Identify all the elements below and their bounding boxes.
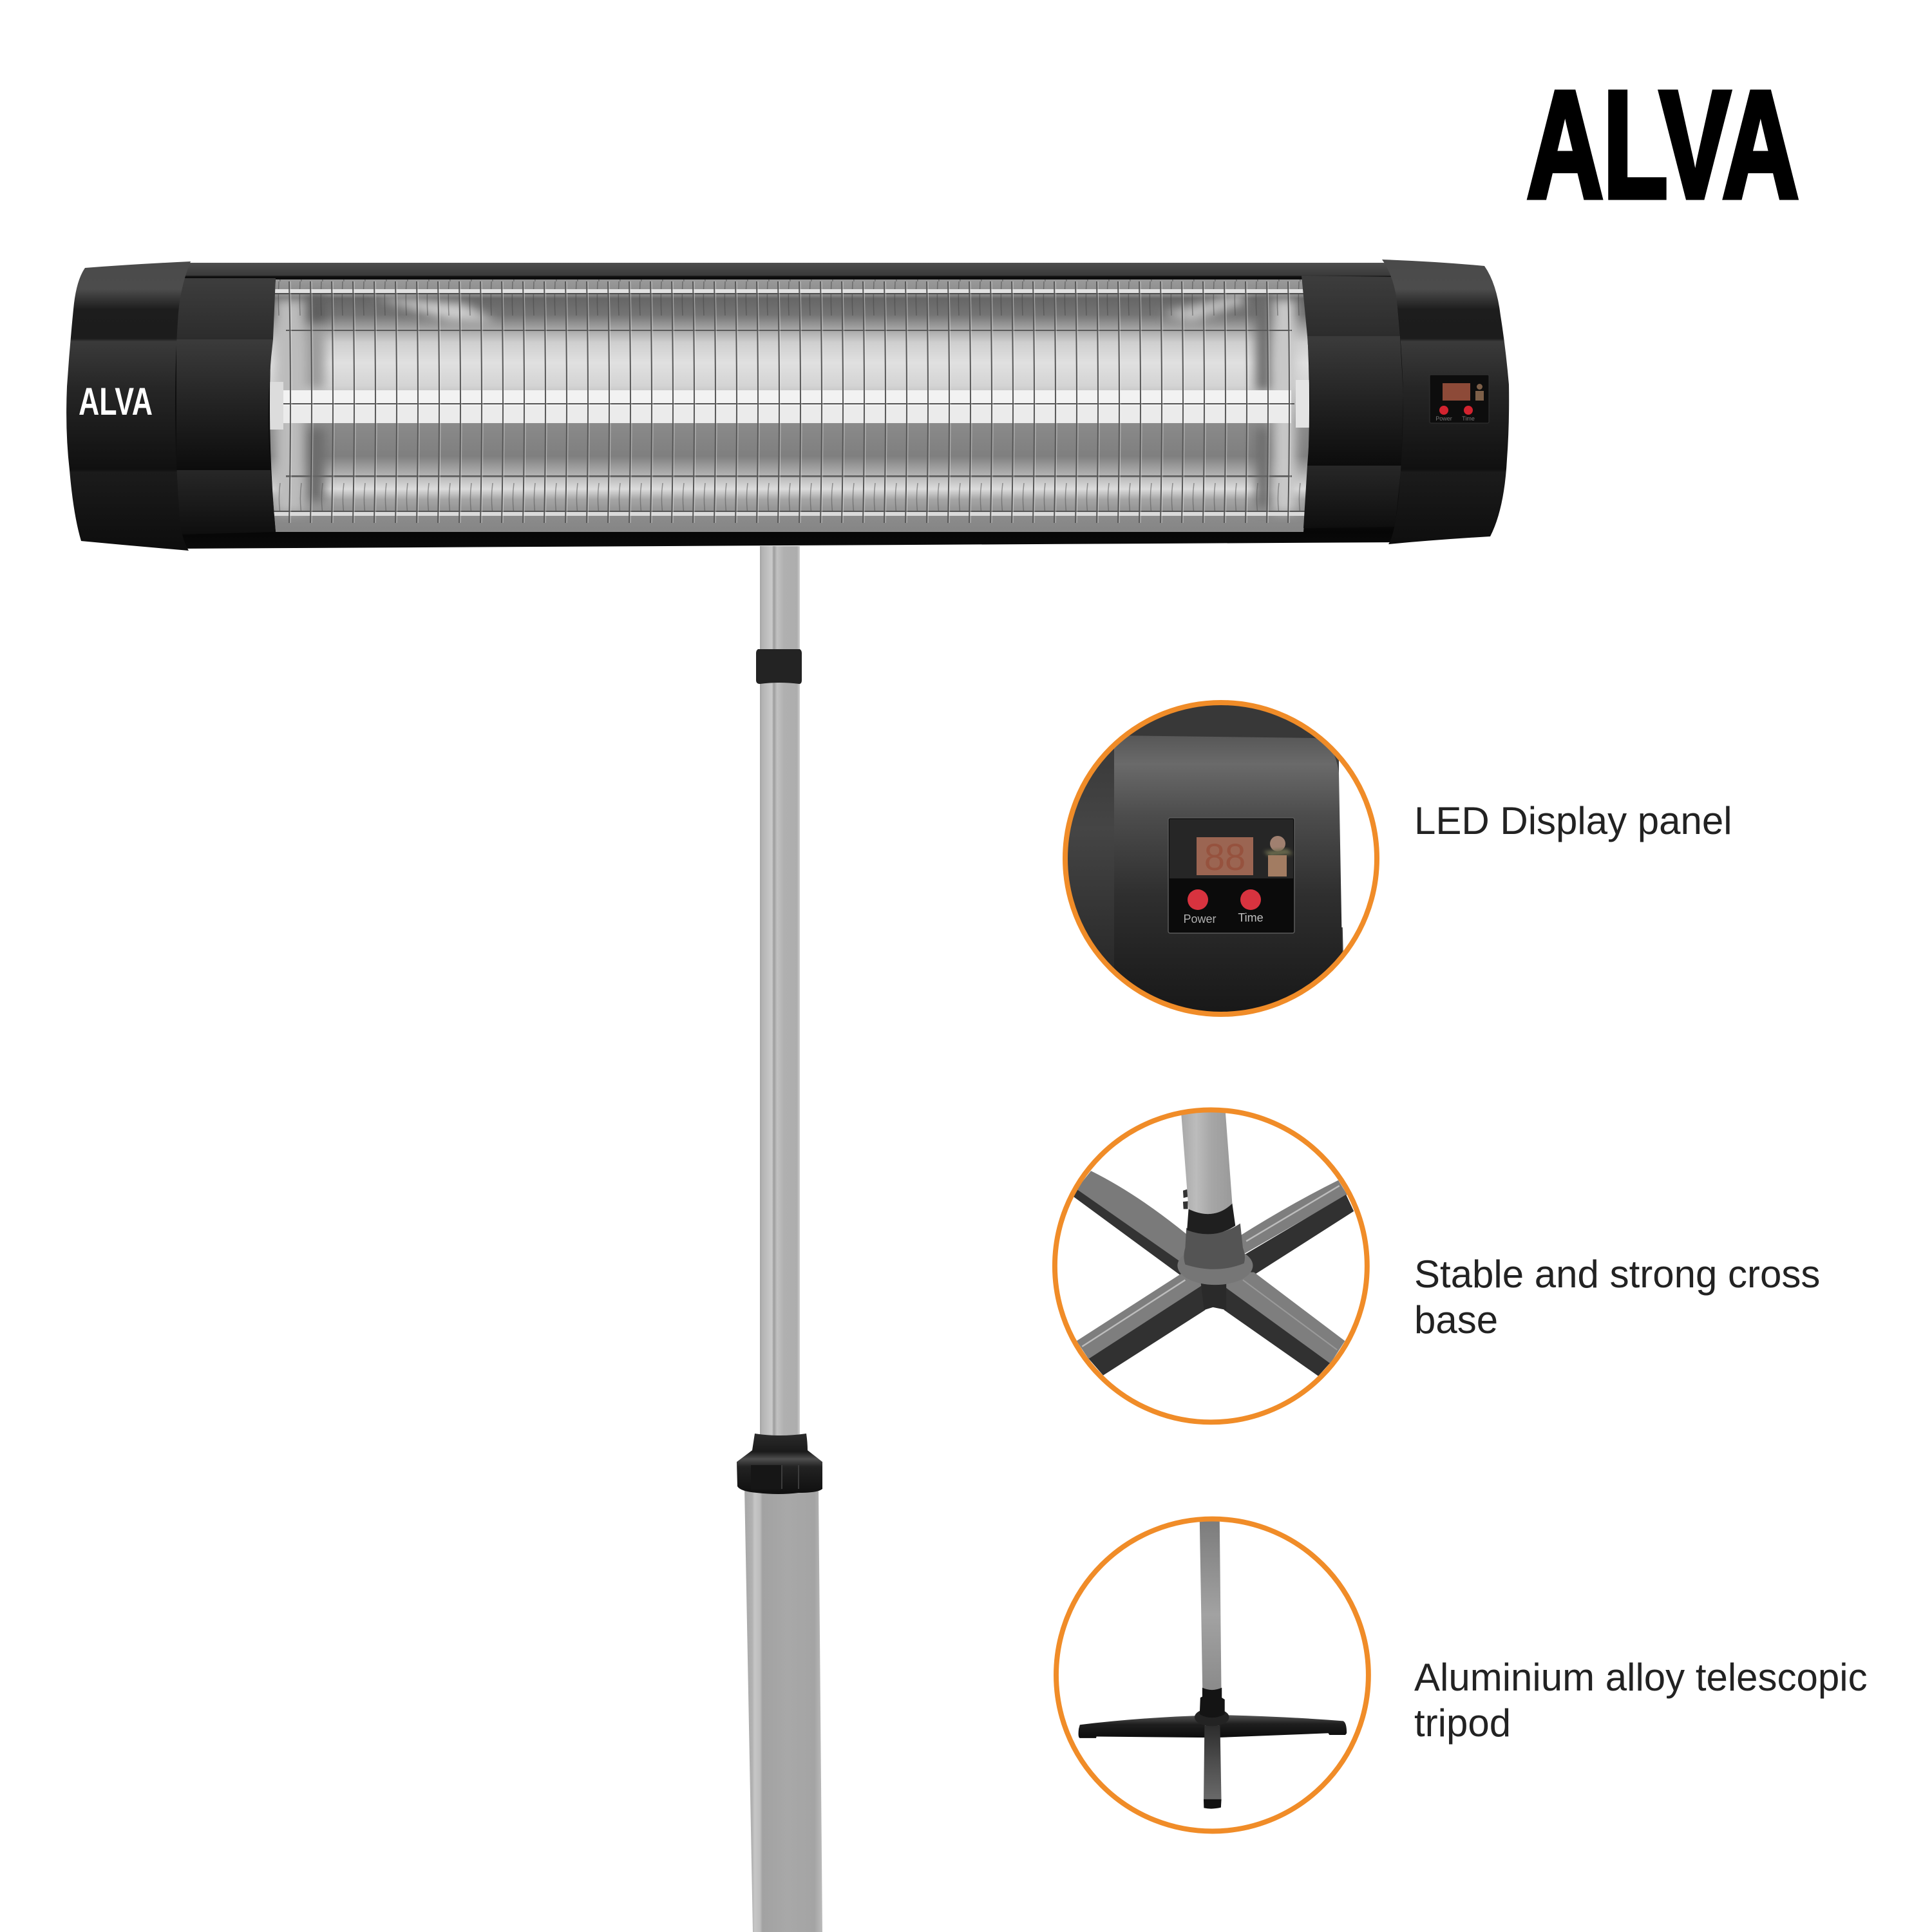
callout: LED display panel	[1063, 700, 1732, 1024]
reflector	[258, 277, 1320, 535]
photo circle: cross base close-up	[1055, 1108, 1367, 1422]
label: Stable and strong cross base: Stable and strong cross	[1414, 1253, 1820, 1296]
photo circle: display close-up	[1063, 700, 1391, 1024]
display box: 88	[1204, 837, 1245, 878]
right end panel	[1302, 276, 1403, 528]
logo: ALVA brand: ALVA	[1527, 60, 1799, 230]
callout: telescopic tripod	[1056, 1519, 1868, 1832]
label: Stable and strong cross base: base	[1414, 1298, 1498, 1341]
front leg	[1204, 1725, 1222, 1801]
flange	[1195, 1709, 1229, 1726]
control panel: Power	[1435, 415, 1452, 422]
adjustment knob	[737, 1434, 822, 1494]
right end cap	[1382, 260, 1509, 544]
left end cap	[66, 261, 191, 551]
photo circle: tripod close-up	[1056, 1519, 1368, 1832]
left foot bar	[1079, 1716, 1208, 1738]
callout: cross base	[1055, 1108, 1820, 1422]
lower-left arm	[1077, 1271, 1205, 1359]
upper-left arm	[1078, 1171, 1186, 1261]
hub	[1184, 1224, 1245, 1269]
control panel	[1430, 375, 1489, 423]
right foot bar	[1217, 1715, 1347, 1738]
wire grille	[258, 281, 1320, 523]
upright tube	[1181, 1108, 1232, 1214]
label: Aluminium alloy telescopic tripod: Aluminium alloy telescopic	[1414, 1656, 1868, 1699]
upper-right arm	[1238, 1180, 1347, 1255]
tube	[1200, 1520, 1222, 1692]
collar	[1187, 1204, 1235, 1234]
label: LED Display panel: LED Display panel	[1414, 799, 1732, 842]
left end panel	[176, 278, 276, 535]
upper pole tube	[760, 546, 800, 1438]
heater unit	[66, 260, 1509, 551]
heater logo: ALVA	[79, 380, 153, 423]
display box	[1168, 818, 1294, 933]
pole: telescopic stand	[737, 546, 822, 1932]
clip hooks	[1183, 1189, 1188, 1209]
lower-right arm	[1221, 1273, 1345, 1364]
panel: heating element window	[258, 277, 1320, 535]
center joint	[1201, 1282, 1226, 1310]
heater housing	[175, 263, 1404, 549]
display box: Power	[1183, 913, 1217, 925]
pole collar	[756, 649, 802, 684]
heating tube	[267, 380, 1312, 430]
flange	[1177, 1253, 1253, 1285]
label: Aluminium alloy telescopic tripod: tripod	[1414, 1701, 1511, 1745]
display box: Time	[1238, 911, 1264, 924]
collar	[1200, 1688, 1225, 1718]
control panel: Time	[1462, 415, 1475, 422]
lower pole tube	[744, 1488, 822, 1932]
